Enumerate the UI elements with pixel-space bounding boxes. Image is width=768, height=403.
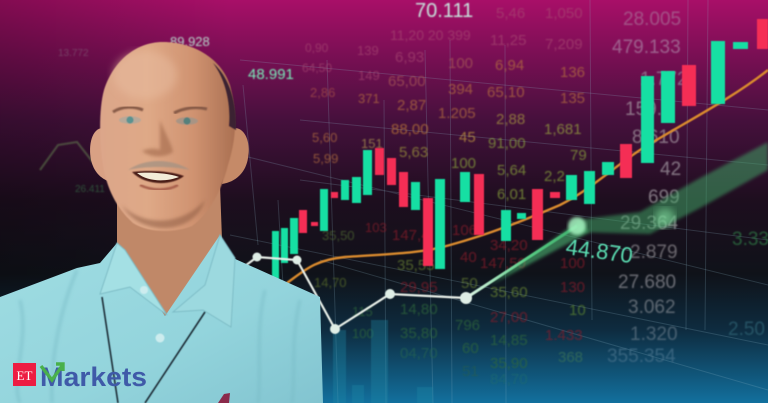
dim green lower numbers: 100 [352,326,374,341]
grey right column numbers: 42 [660,159,681,180]
right ear [222,128,249,184]
dim green lower numbers: 60 [462,340,479,357]
red numbers: 103 [365,220,387,235]
orange numbers: 151 [361,136,383,151]
mouth [132,171,184,183]
left ear [90,128,110,182]
magenta area numbers: 1,050 [545,5,583,22]
grey right column numbers: 2.879 [630,242,678,263]
orange numbers: 45 [459,129,476,146]
magenta area numbers: 7,209 [545,36,583,53]
orange numbers: 65,10 [487,84,525,101]
red numbers: 27,00 [490,309,528,326]
magenta area numbers: 11,25 [490,32,526,49]
magenta area numbers: 149 [358,68,380,83]
dim green lower numbers [352,301,583,388]
dim green lower numbers: 115 [352,304,373,319]
olive green numbers [314,135,587,319]
dim green lower numbers: 796 [455,317,480,334]
glowing green trend band [466,142,768,298]
olive green numbers: 35,50 [322,228,355,243]
olive green numbers: 79 [570,147,587,164]
red candles [299,19,768,266]
red numbers: 147,4 [392,227,430,244]
red numbers: 40 [460,249,477,266]
candlestick chart [272,19,768,280]
hair shadow on the right side [213,63,236,130]
collar buttons [140,286,164,342]
olive green numbers: 6,01 [497,186,526,203]
bottom translucent bars [333,320,433,403]
top headline numbers: 26.411 [75,184,105,195]
magenta area numbers: 6,93 [395,49,424,66]
white line chart with nodes [245,252,472,334]
dim green lower numbers: 35,90 [490,355,528,372]
olive green numbers: 100 [451,155,476,172]
dim green lower numbers: 84,70 [490,371,528,388]
dim green lower numbers: 14,85 [490,332,528,349]
olive green numbers: 35,60 [490,284,528,301]
grey right column numbers [607,9,768,367]
top headline numbers: 13.772 [58,48,89,59]
shirt [0,235,323,403]
shirt logo detail [218,393,230,403]
grey right column numbers: 29.364 [620,213,679,234]
red numbers: 106 [452,222,477,239]
moustache shadow [128,161,190,170]
person [0,42,323,403]
olive green numbers: 91,00 [488,135,526,152]
olive green numbers: 2,2 [544,168,565,185]
grey right column numbers: 1.320 [630,324,678,345]
grey right column numbers: 27.680 [618,272,676,293]
neck [117,185,222,316]
orange numbers: 2,86 [310,85,335,100]
magenta area numbers: 0,90 [305,41,329,55]
orange numbers [310,55,585,166]
orange numbers: 5,99 [313,151,338,166]
grey right column numbers: 2.50 [728,319,765,340]
grey right column numbers: 159.5 [625,99,673,120]
dim green lower numbers: 04,70 [400,345,438,362]
olive green numbers: 10 [569,302,586,319]
orange numbers: 371 [358,91,380,106]
green check arrow [41,364,63,380]
orange numbers: 1,681 [544,121,582,138]
label 44.870: 44.870 [564,234,634,268]
head [100,42,235,231]
white undershirt [195,245,228,300]
faint left green line [40,142,95,170]
teeth [137,173,179,180]
red numbers: 29,95 [400,279,438,296]
jaw shadow [122,200,205,228]
grey right column numbers: 479.133 [612,37,681,58]
grey right column numbers: 3.33 [732,229,768,250]
orange numbers: 135 [560,90,585,107]
top headline numbers [58,0,473,195]
grey right column numbers: 699 [648,187,680,208]
orange numbers: 1.205 [438,105,476,122]
lanyard [102,297,205,403]
eyebrows [113,107,207,113]
left eye [119,116,141,124]
right collar [173,235,235,327]
dim green lower numbers: 368 [558,349,583,366]
logo: ET Markets [13,362,147,392]
olive green numbers: 14,70 [314,275,347,290]
orange numbers: 136 [560,64,585,81]
top headline numbers: 70.111 [415,0,473,22]
olive green numbers: 50 [461,275,478,292]
red numbers: 34,20 [490,237,528,254]
forehead highlight [113,51,177,99]
Markets wordmark: Markets [40,362,147,392]
left collar [100,243,167,315]
shirt folds [17,270,300,403]
orange numbers: 100 [448,55,473,72]
top headline numbers: 89.928 [170,34,210,49]
grey right column numbers: 8.610 [632,127,680,148]
red numbers: 1.433 [545,327,583,344]
red numbers: 100 [560,255,585,272]
orange numbers: 5,60 [312,130,337,145]
lower lip [140,185,178,190]
magenta area numbers [302,5,583,83]
magenta area numbers: 11,20 20 399 [390,27,471,43]
orange numbers: 2,88 [496,111,525,128]
grey right column numbers: 355.354 [607,346,676,367]
olive green numbers: 35,55 [397,257,435,274]
orange numbers: 394 [448,81,473,98]
grey right column numbers: 1.772 [640,69,688,90]
top headline numbers: 48.991 [248,66,294,83]
market data grid [230,0,768,403]
green candles [272,41,748,280]
grey right column numbers: 3.062 [628,297,676,318]
dim green lower numbers: 35,80 [400,325,438,342]
magenta area numbers: 5,46 [496,5,525,22]
dim green lower numbers: 51 [462,363,479,380]
right eye [176,117,198,125]
ET red box: ET [17,368,32,383]
red numbers [365,220,585,344]
grey right column numbers: 28.005 [623,9,681,30]
orange numbers: 65,00 [388,73,426,90]
red numbers: 130 [560,279,585,296]
orange moving average line [287,70,768,283]
olive green numbers: 5,63 [399,144,428,161]
red numbers: 147,50 [480,255,526,272]
magenta area numbers: 64,50 [302,61,332,75]
olive green numbers: 5,64 [497,162,526,179]
orange numbers: 6,94 [495,57,524,74]
orange numbers: 2,87 [397,97,426,114]
magenta area numbers: 139 [357,43,379,58]
nose [142,120,173,156]
orange numbers: 88,00 [391,121,429,138]
dim green lower numbers: 14,80 [400,301,438,318]
